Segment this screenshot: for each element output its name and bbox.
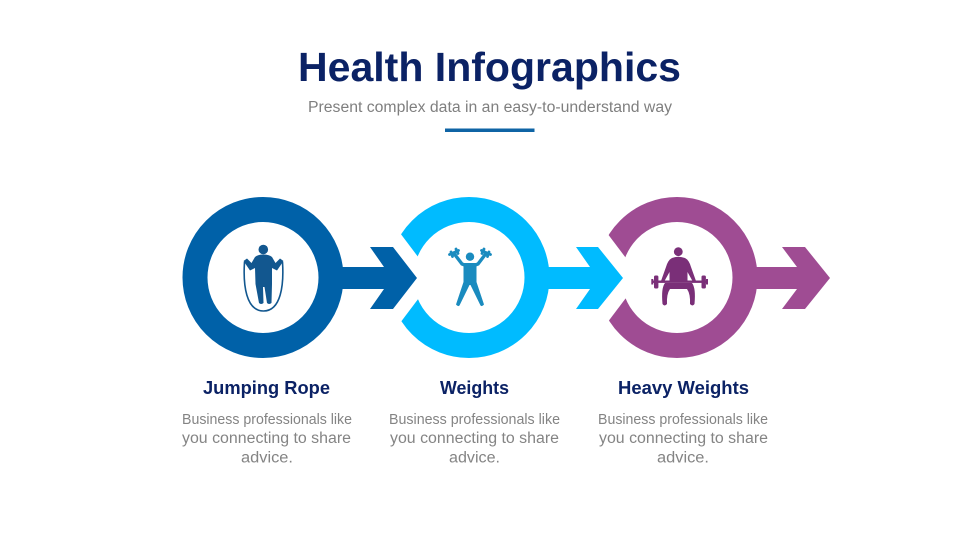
text block: jumping rope description: advice. [241,450,293,466]
step 1: jumping rope ring and arrow [195,210,417,346]
text block: jumping rope description: you connecting to share [182,430,351,447]
title: Health Infographics [298,44,681,90]
icon: jumping rope figure [244,245,284,311]
text block: heavy weights description [598,412,768,466]
subtitle: Present complex data in an easy-to-understand way [308,99,672,116]
text block: weights description: Business professionals like [389,412,560,428]
text block: jumping rope description: Business professionals like [182,412,352,428]
text block: weights description: advice. [449,450,500,466]
text block: jumping rope description [182,412,352,466]
step 3: heavy weights ring and arrow [590,210,830,346]
text block: heavy weights description: you connecting to share [599,430,768,447]
step 2: weights ring and arrow [380,210,623,346]
icon: heavy weights figure [651,247,708,306]
text block: heavy weights description: Business professionals like [598,412,768,428]
heading: heavy weights: Heavy Weights [618,377,749,398]
title underline [445,128,534,132]
text block: heavy weights description: advice. [657,450,709,466]
text block: weights description: you connecting to share [390,430,559,447]
heading: jumping rope: Jumping Rope [203,377,330,398]
text block: weights description [389,412,560,466]
heading: weights: Weights [440,377,509,398]
icon: weights figure [450,249,490,306]
